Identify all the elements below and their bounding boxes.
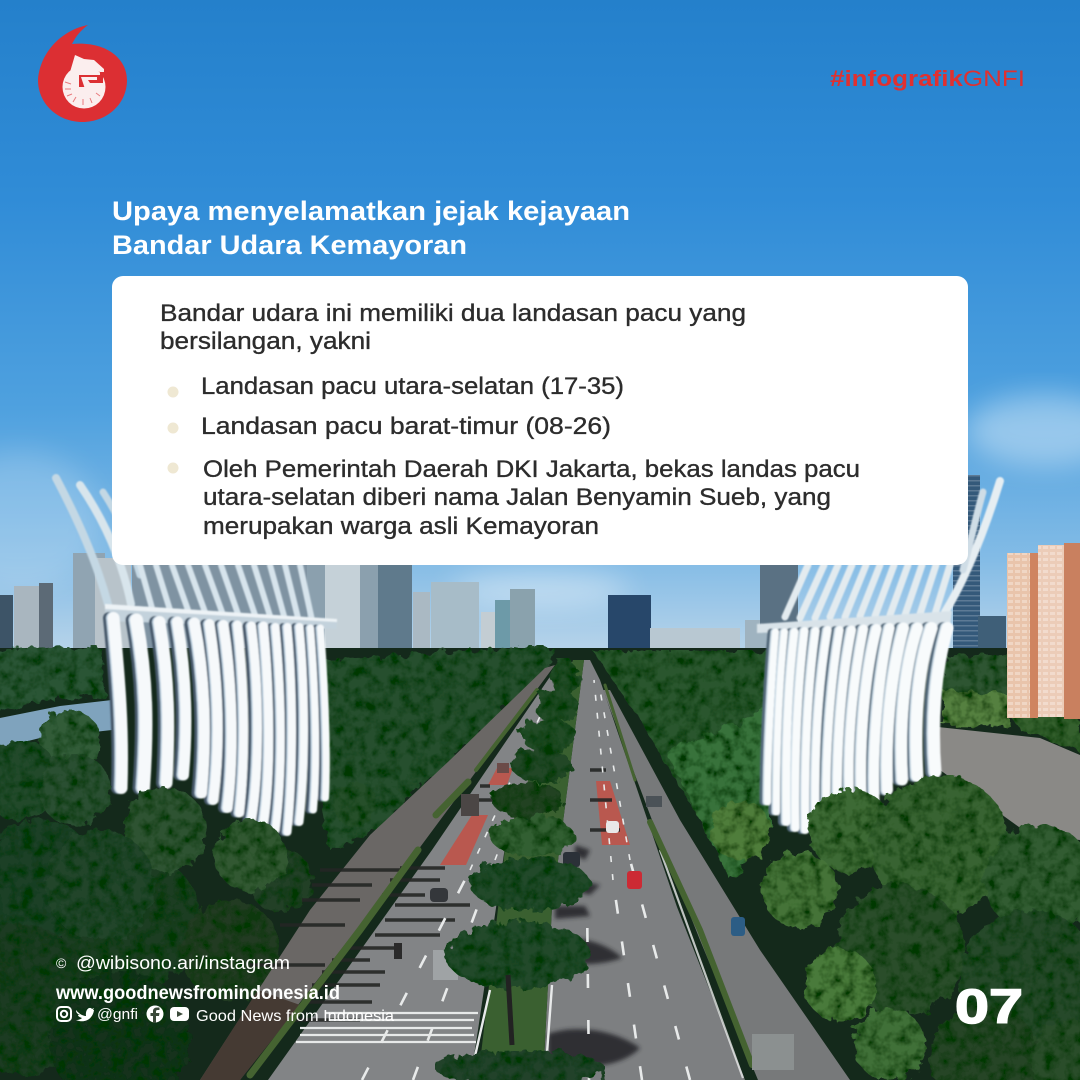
logo white emblem <box>62 55 110 108</box>
distant trees and ground <box>0 648 1080 1080</box>
foreground tree left of arch <box>39 754 377 940</box>
left arch lower ribs <box>109 618 322 832</box>
intro text: Bandar udara ini memiliki dua landasan pacu yang <box>160 300 746 327</box>
icon: instagram <box>57 1007 71 1021</box>
skyline buildings <box>0 475 1006 652</box>
median trees <box>435 658 605 1080</box>
median tree trunk <box>508 975 512 1045</box>
clouds <box>0 394 1080 608</box>
lake <box>0 700 112 748</box>
road shadows <box>250 770 620 1020</box>
icon: facebook <box>146 1006 164 1023</box>
page number: 07 <box>955 981 1023 1034</box>
bullet three: utara-selatan diberi nama Jalan Benyamin Sueb, yang <box>203 484 831 511</box>
tree shadows on right carriageway <box>548 845 640 1067</box>
bullet three <box>168 456 860 540</box>
left tree belt <box>0 645 555 1080</box>
right carriageway <box>543 660 745 1080</box>
intro text: bersilangan, yakni <box>160 328 371 355</box>
photo credit: © <box>56 955 67 971</box>
right tree belt and field <box>592 650 1080 880</box>
right arch beam <box>757 611 952 633</box>
website: www.goodnewsfromindonesia.id <box>55 983 340 1004</box>
panel: white text card <box>112 276 968 565</box>
left arch upper ribs <box>56 478 312 620</box>
icon: twitter <box>76 1008 94 1021</box>
left carriageway <box>268 662 573 1080</box>
red bus lanes <box>440 768 630 865</box>
bullet three: merupakan warga asli Kemayoran <box>203 513 599 540</box>
right arch lower ribs <box>763 628 943 830</box>
hedges <box>250 685 752 1075</box>
brick apartment towers <box>1007 543 1080 719</box>
social name: Good News from Indonesia <box>196 1008 394 1025</box>
left arch beam <box>105 604 337 629</box>
right arch upper ribs <box>785 481 1000 618</box>
parking lot <box>938 727 1080 840</box>
crosswalk <box>296 1013 478 1042</box>
photo credit: @wibisono.ari/instagram <box>76 953 290 973</box>
heading: Upaya menyelamatkan jejak kejayaan <box>112 196 630 226</box>
foreground trees right <box>710 775 1080 1080</box>
heading: Bandar Udara Kemayoran <box>112 230 467 260</box>
bullet two: Landasan pacu barat-timur (08-26) <box>201 413 611 440</box>
icon: youtube <box>170 1007 189 1021</box>
logo: GNFI red swirl <box>38 25 127 122</box>
card background <box>112 276 968 565</box>
logo red swirl shape <box>38 25 127 122</box>
bullet three: Oleh Pemerintah Daerah DKI Jakarta, bekas landas pacu <box>203 456 860 483</box>
social handle: @gnfi <box>97 1006 138 1023</box>
right service road <box>603 690 850 1080</box>
intro text <box>160 300 746 355</box>
left service road <box>200 665 555 1080</box>
hashtag: #infografik GNFI <box>830 66 1025 91</box>
heading <box>112 196 630 260</box>
sky <box>0 0 1080 660</box>
social row <box>57 1006 394 1025</box>
left arch monument <box>56 478 337 832</box>
bullet one: Landasan pacu utara-selatan (17-35) <box>201 373 624 400</box>
lane markings <box>362 680 743 1080</box>
vehicles <box>394 763 794 1070</box>
right arch monument <box>757 481 1000 830</box>
median grass <box>478 660 584 1080</box>
